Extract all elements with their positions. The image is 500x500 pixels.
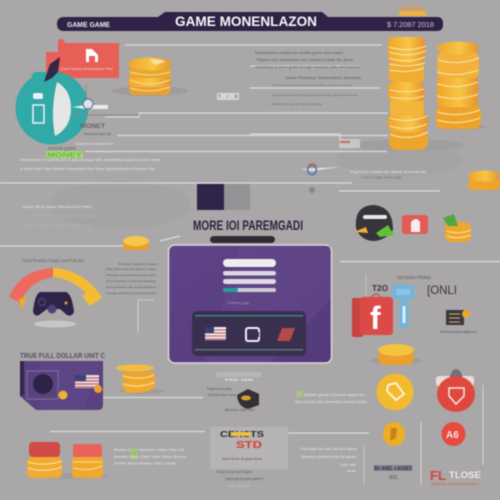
panel: purple screen: Game pay — [227, 300, 249, 305]
bottom red brand: Game Monetization — [431, 481, 479, 486]
text block: left middle — [20, 204, 98, 228]
icon: small gold coin — [383, 422, 405, 446]
text block: bottom center: Purchase for user list and game — [300, 446, 358, 451]
text block: right center — [350, 169, 427, 180]
panel: bottom center card: CENSTS — [220, 430, 265, 439]
panel: purple card — [20, 361, 103, 410]
bottom label: BU ANEL LAUSES — [374, 466, 412, 472]
dark coin tag — [237, 389, 259, 409]
text block: center left of panel: Store conversion of premium packages — [106, 279, 156, 283]
panel: bottom center card: Sales rate game — [228, 483, 251, 488]
text block: right center: Paid to play store plan — [362, 176, 402, 180]
text block: top center: Game Revenue Subscription Services — [285, 75, 361, 80]
small label: center: Bonus rate tier — [225, 407, 256, 412]
panel: bottom center card: STD — [236, 440, 262, 451]
text block: bottom center — [300, 446, 358, 473]
text block: top left: In Game Store Sales Bundles Subscription Fees Game Sponsorship And Premium Pass — [20, 166, 155, 171]
text block: center right: Mobile game revenue sales list — [304, 392, 365, 397]
small label: center: Payment plan — [207, 386, 232, 391]
text block: top left: MONET — [80, 124, 105, 130]
icon: small board: Monetization — [440, 329, 477, 334]
text block: center right: Item packs and rewarded content plans — [295, 399, 367, 404]
sub-panel: dark payment tray — [192, 311, 306, 356]
gauge chart — [9, 268, 102, 310]
background shadow shapes — [50, 144, 465, 229]
text block: center left of panel: Purchase rating for players — [118, 262, 159, 266]
text block: center left of panel: Average payment per paying customer — [106, 291, 156, 295]
icon: game controller — [33, 292, 76, 328]
bracket box label — [340, 139, 360, 148]
panel: bottom center card: Revenue by each region — [217, 469, 252, 474]
panel: purple screen — [168, 245, 332, 363]
text block: center left of panel — [22, 258, 159, 295]
bottom label — [374, 465, 412, 481]
title: GAME MONENLAZON — [175, 14, 317, 29]
chip label: T.I.R — [218, 94, 238, 100]
card caption: TRUE FULL DOLLAR UNIT C — [20, 353, 105, 360]
text block: right center: Payment models for game revenue list — [350, 169, 427, 174]
icon: dark mascot — [354, 205, 394, 241]
text block: top left: MONEY — [47, 153, 82, 159]
icon: red sign — [46, 39, 119, 78]
red coin stacks — [27, 442, 108, 479]
coin stack: tall center — [355, 37, 465, 151]
text block: bottom left: Bundle Pack Offer Sale Store Bonus — [114, 454, 186, 459]
icon: red card — [277, 328, 295, 341]
text block: top center — [255, 50, 361, 106]
panel: bottom center card: Store list for all game items — [222, 456, 262, 461]
text block: center left of panel: Daily active users and players in game — [106, 267, 156, 271]
text block: top center: Players buy virtual items and currency inside the game — [257, 57, 354, 62]
dark circle icon — [27, 371, 58, 399]
text block: top left — [20, 124, 160, 171]
text block: bottom center: Ads — [347, 468, 356, 473]
bottom red brand — [430, 468, 481, 486]
bottom label: SOL — [389, 475, 398, 481]
text block: top left: Revenue plan list — [84, 131, 112, 136]
icon: small board — [440, 310, 477, 334]
panel: bottom center card — [210, 427, 288, 488]
text: top right labels: T2O — [372, 284, 388, 293]
coin stack: right edge — [468, 170, 500, 190]
icon: red number badge: A6 — [446, 430, 459, 441]
heading: center — [193, 184, 303, 233]
text block: left middle: Premium Currency Store Rewards Plan — [20, 223, 92, 228]
icon: red bag with f — [352, 294, 393, 337]
icon: teal flask — [16, 57, 88, 144]
text block: top left: Monetization for games and in app purchase with advertising model and store sales — [20, 157, 160, 162]
small label: center — [207, 372, 261, 412]
icon: red tile — [402, 215, 428, 234]
header banner — [57, 12, 443, 31]
icon: red sign: Game Money Monetization Plan — [60, 67, 113, 71]
text block: center left of panel: Ad impressions rate across platforms — [106, 285, 156, 289]
flag — [75, 375, 99, 388]
coin stack: tall right — [436, 42, 486, 130]
banner left label: GAME GAME — [67, 22, 110, 29]
text block: top center: Premium access and battle pass income — [272, 83, 352, 87]
coin: center left — [123, 236, 149, 250]
coin stack: center bottom — [116, 364, 164, 394]
text block: top left: Income game — [48, 146, 76, 152]
text block: top center: Merch and licensing — [272, 102, 323, 106]
text block: bottom left: Green Store Money Pass Game — [114, 460, 177, 466]
icon: blue clip — [394, 287, 412, 328]
gadget icon — [72, 85, 139, 115]
text block: top center: Monetization models for mobile game store sales — [255, 50, 343, 55]
coin stack: top left — [112, 58, 188, 96]
small browser icon — [300, 164, 340, 193]
dark pill — [210, 236, 275, 243]
text: top right labels: DESIGN ITEMS — [397, 275, 431, 280]
text: top right labels: [ONLI — [427, 283, 457, 297]
text block: bottom center: Monetize platform plan list game — [301, 454, 357, 459]
text block: bottom center: Sale rate — [340, 462, 357, 467]
text: top right labels — [372, 275, 457, 297]
text block: top center: Sponsors and brand partners for game events — [272, 93, 358, 97]
panel: bottom center card: Game plan by each platform — [225, 476, 264, 481]
coin: single gold — [370, 344, 422, 365]
icon: flag — [205, 327, 226, 340]
icon: yellow ticket coin — [376, 374, 414, 410]
text block: center left of panel: Game Revenue Gauge Level Rate Bar — [22, 258, 84, 263]
text block: left middle: Game Store Sales Models And Plans — [22, 204, 92, 209]
top coin — [399, 4, 426, 16]
icon: red number badge — [442, 422, 466, 446]
icon: square C — [246, 328, 259, 341]
icon: red shield badge — [436, 369, 475, 412]
icon: money coin — [443, 214, 471, 242]
text block: bottom left — [114, 447, 186, 466]
text block: top center: Advertising revenue grows through rewarded video and banners — [255, 64, 360, 69]
bottom red brand: FL — [430, 468, 446, 483]
banner date: $ 7.2087 2018 — [387, 22, 434, 29]
text block: center left of panel: Retention and reward count for users — [106, 273, 156, 277]
small label: center: Subscribe now — [208, 392, 236, 397]
icon: red bag with f: f — [370, 300, 381, 336]
bottom red brand: TLOSE — [449, 470, 481, 480]
small label: center: FAN JAN — [225, 377, 253, 382]
text block: left middle: Item Pack Boost Offer Store Bundle — [35, 213, 98, 218]
heading: center: MORE IOI PAREMGADI — [193, 217, 303, 233]
text block: center right — [295, 391, 367, 404]
text block: top left: Game revenue list — [75, 141, 114, 146]
text block: bottom left: Money Game Revenue Game Plan List — [114, 447, 185, 452]
